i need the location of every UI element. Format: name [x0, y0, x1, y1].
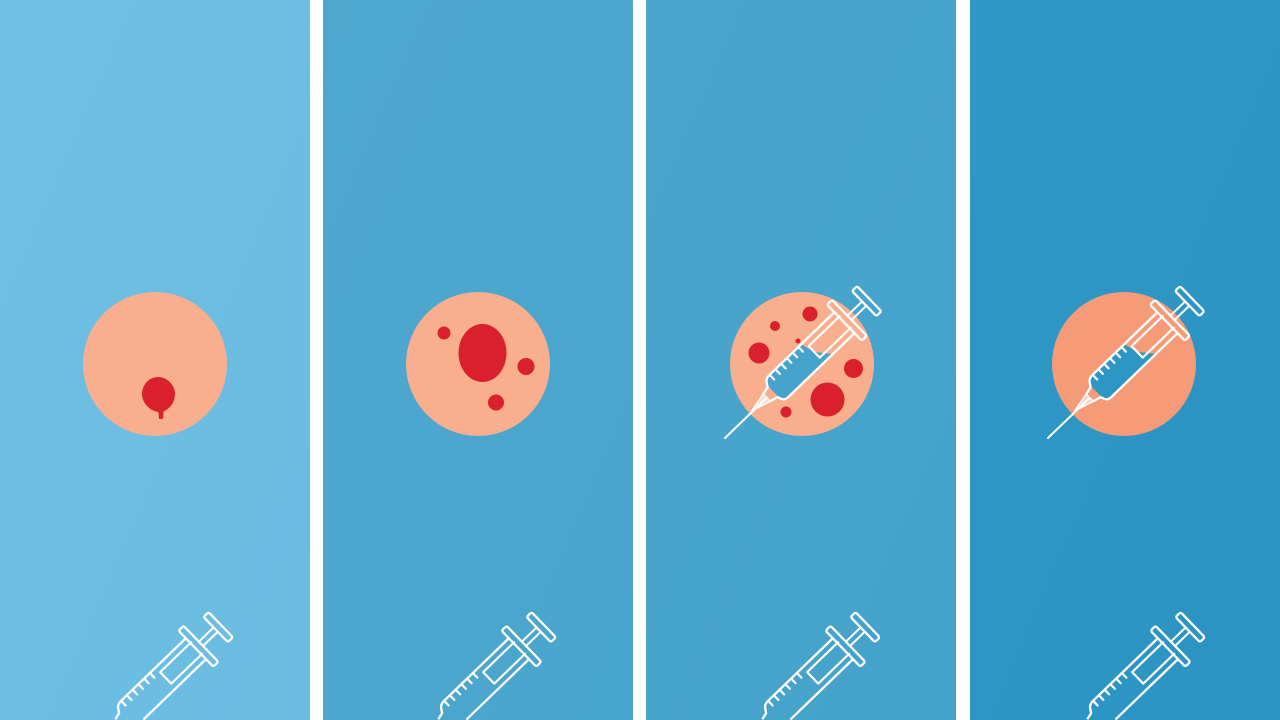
- panel: stage 1 background: [0, 0, 310, 720]
- icon: outline syringe panel 2: [425, 607, 561, 720]
- icon: syringe over clear skin: [1031, 281, 1210, 456]
- skin circle on darkest panel: [1052, 292, 1196, 436]
- icon: outline syringe panel 4: [1074, 607, 1210, 720]
- skin circle with single drop of blood: [83, 292, 227, 436]
- skin circle with several red spots: [406, 292, 550, 436]
- icon: outline syringe panel 1: [102, 607, 238, 720]
- skin circle with red spots: [730, 292, 874, 436]
- panel: stage 4 background: [970, 0, 1280, 720]
- icon: syringe over spotted skin: [708, 281, 887, 456]
- panel: stage 3 background: [646, 0, 956, 720]
- panel: stage 2 background: [323, 0, 633, 720]
- icon: outline syringe panel 3: [749, 607, 885, 720]
